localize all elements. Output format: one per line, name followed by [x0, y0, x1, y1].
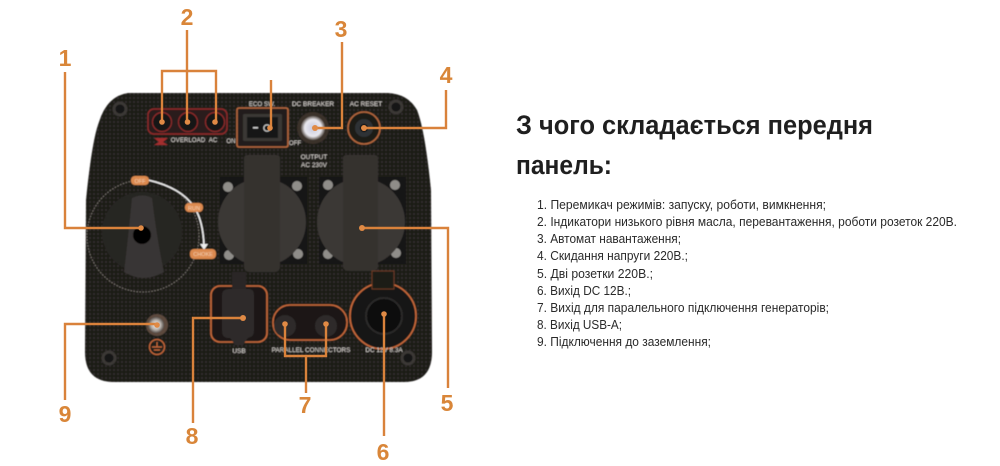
- mode dial: [87, 176, 216, 292]
- list of front panel parts: 6. Вихід DC 12В.;: [537, 284, 631, 298]
- screw: bottom right: [400, 350, 416, 366]
- list of front panel parts: 3. Автомат навантаження;: [537, 232, 681, 246]
- label: output AC 230V: [301, 154, 328, 169]
- callout 3: [267, 16, 347, 131]
- DC breaker: DC BREAKER: [292, 101, 334, 108]
- list of front panel parts: 8. Вихід USB-A;: [537, 318, 622, 332]
- callout 5: 5: [441, 390, 454, 416]
- AC reset: [348, 101, 382, 144]
- label: OFF: OFF: [289, 140, 301, 147]
- USB port: USB: [232, 348, 246, 355]
- callout 9: 9: [59, 401, 71, 427]
- callout 7: 7: [299, 392, 311, 418]
- heading: [516, 110, 873, 180]
- callout 3: 3: [335, 16, 347, 42]
- list of front panel parts: 7. Вихід для паралельного підключення генераторів;: [537, 301, 829, 315]
- list of front panel parts: 1. Перемикач режимів: запуску, роботи, вимкнення;: [537, 198, 826, 212]
- heading: З чого складається передня: [516, 110, 873, 140]
- list of front panel parts: 9. Підключення до заземлення;: [537, 335, 711, 349]
- callout 2: [159, 4, 218, 125]
- callout 9: [59, 322, 160, 427]
- callout 8: [186, 315, 246, 449]
- screw: bottom left: [102, 350, 116, 366]
- DC 12V outlet: DC 12V 8.3A: [365, 347, 403, 354]
- ECO switch: ECO SW.: [249, 101, 276, 108]
- label: output AC 230V: AC 230V: [301, 162, 328, 169]
- callout 1: 1: [59, 45, 72, 71]
- screw: top right: [388, 100, 404, 114]
- callout 5: [359, 225, 454, 416]
- parallel connectors: [272, 305, 350, 354]
- label: output AC 230V: OUTPUT: [301, 154, 327, 161]
- callout 6: 6: [377, 439, 389, 465]
- screw: top left: [112, 102, 128, 116]
- callout 7: [282, 321, 329, 418]
- heading: панель:: [516, 150, 612, 180]
- badge: CHOKE: CHOKE: [193, 252, 213, 258]
- indicator lights group: OVERLOAD: [171, 137, 206, 144]
- socket: right: [317, 155, 406, 271]
- callout 6: [377, 311, 389, 465]
- USB port: [211, 272, 267, 355]
- DC breaker: [292, 101, 334, 144]
- callout 1: [59, 45, 144, 231]
- callout 4: 4: [440, 62, 453, 88]
- list of front panel parts: 4. Скидання напруги 220В.;: [537, 249, 688, 263]
- indicator lights group: [148, 109, 227, 145]
- indicator lights group: AC: [209, 137, 218, 144]
- badge: OFF: OFF: [134, 179, 146, 185]
- list of front panel parts: 5. Дві розетки 220В.;: [537, 267, 653, 281]
- DC 12V outlet: [350, 271, 416, 354]
- ground terminal: [146, 314, 168, 354]
- AC reset: AC RESET: [350, 101, 382, 108]
- parallel connectors: PARALLEL CONNECTORS: [272, 347, 350, 354]
- callout 2: 2: [181, 4, 193, 30]
- list of front panel parts: 2. Індикатори низького рівня масла, перевантаження, роботи розеток 220В.: [537, 215, 957, 229]
- ECO switch: [237, 101, 288, 147]
- list of front panel parts: [537, 198, 957, 349]
- badge: RUN: RUN: [188, 206, 200, 212]
- panel: generator front panel: [85, 93, 432, 382]
- socket: left: [218, 155, 307, 272]
- callout 4: [361, 62, 453, 131]
- label: ON: ON: [226, 138, 236, 145]
- callout 8: 8: [186, 423, 199, 449]
